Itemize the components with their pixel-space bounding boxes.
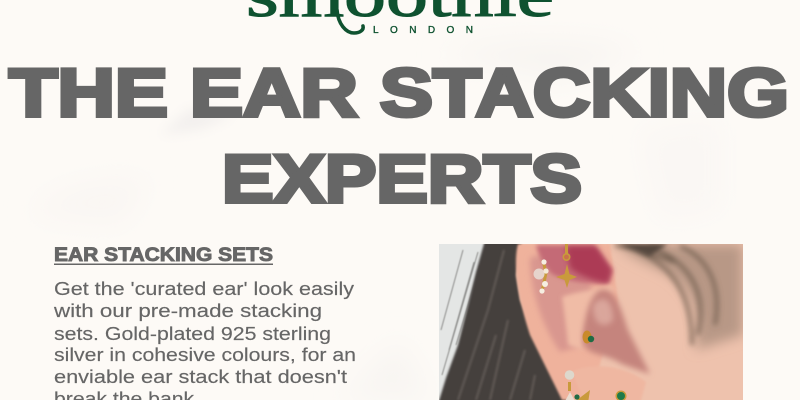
photo background (439, 244, 490, 400)
body text: sets. Gold-plated 925 sterling (54, 324, 331, 344)
ear lobe (590, 367, 645, 400)
piercing: drop earring (564, 370, 590, 400)
outer ear (516, 244, 618, 400)
piercing: cluster stud (534, 259, 549, 294)
piercing: green stud (582, 330, 594, 344)
logo tagline: LONDON (373, 25, 473, 36)
neck hair (618, 244, 743, 350)
inner ear (583, 289, 650, 374)
photo: ear with piercings (438, 240, 743, 400)
ear fold (562, 285, 614, 350)
title: THE EAR STACKING (9, 55, 789, 131)
body text (53, 279, 356, 400)
body text: Get the 'curated ear' look easily (54, 279, 354, 299)
hair strands (441, 250, 480, 375)
title (9, 55, 789, 217)
logo: Smoothie London (246, 0, 554, 36)
ear scapha pink (530, 256, 592, 352)
logo swash (337, 10, 363, 33)
heading: ear stacking sets: EAR STACKING SETS (54, 245, 273, 266)
red top of ear (536, 245, 612, 284)
piercing: emerald stud (616, 390, 626, 400)
piercing: star charm (556, 244, 577, 288)
body text: enviable ear stack that doesn't (54, 367, 347, 387)
title: EXPERTS (222, 141, 582, 217)
body text: with our pre-made stacking (53, 301, 322, 321)
body text: silver in cohesive colours, for an (54, 345, 356, 365)
hair (438, 240, 568, 400)
